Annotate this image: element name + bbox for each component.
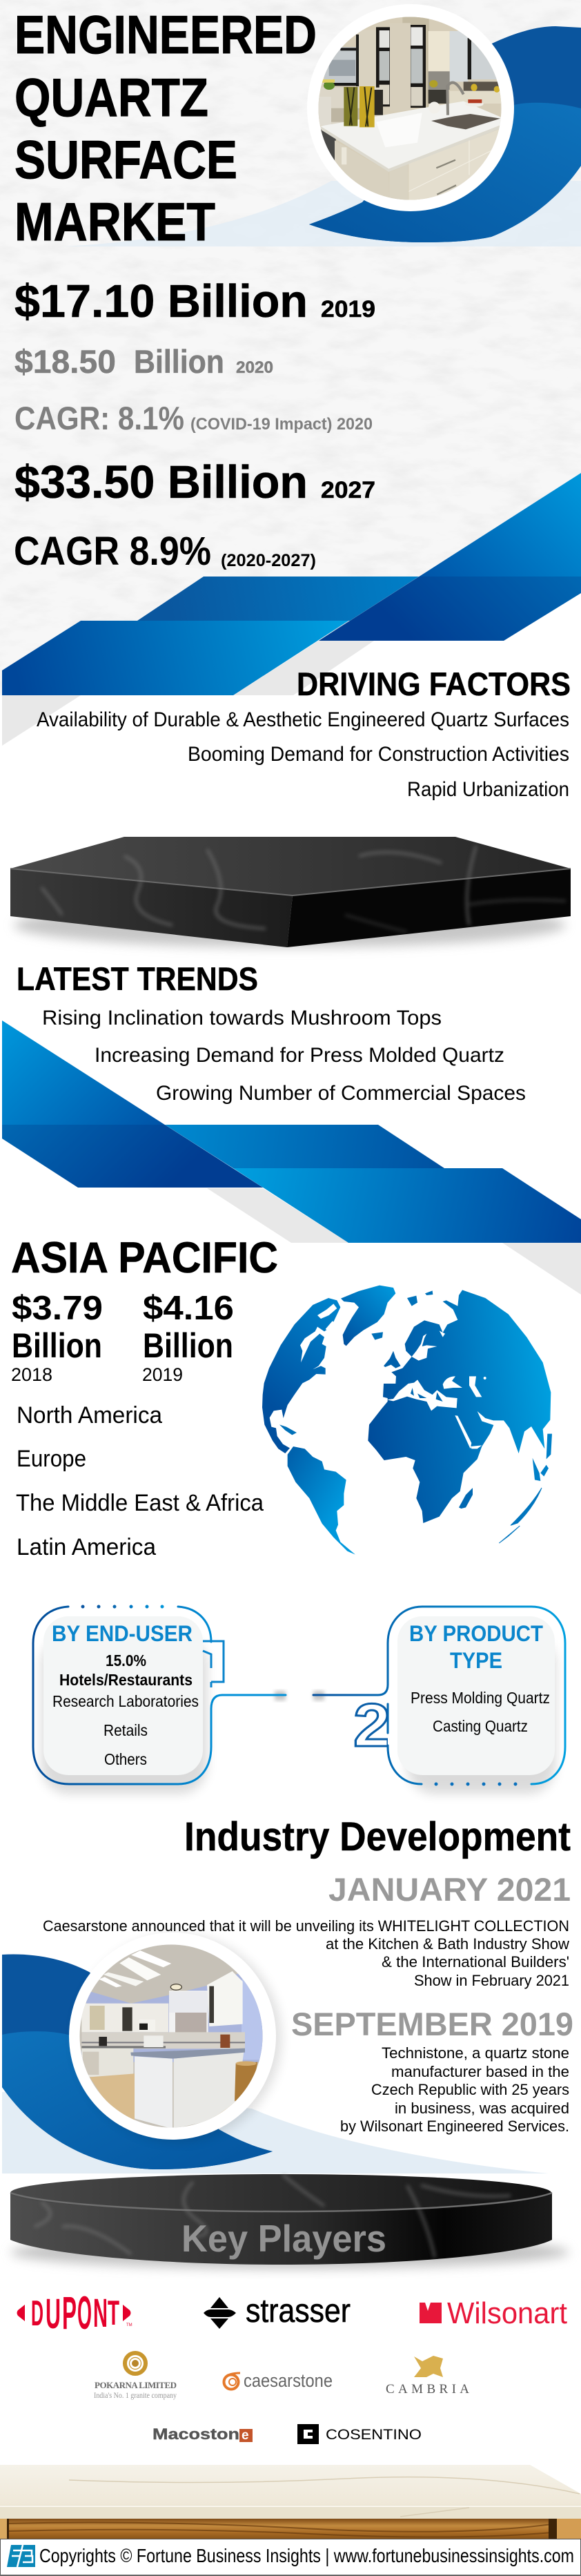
logo: dupont: O [77,2287,92,2339]
logo: dupont: TM [126,2323,132,2327]
title: QUARTZ [14,67,208,128]
logo: caesarstone: caesarstone [244,2370,333,2391]
title: MARKET [14,191,215,252]
development text: technistone: Czech Republic with 25 years [371,2081,569,2098]
panel outline [313,1607,565,1784]
other regions list: The Middle East & Africa [16,1490,264,1516]
other regions list: Latin America [17,1534,156,1560]
logo: dupont: N [93,2291,108,2336]
driving factors list: Booming Demand for Construction Activities [188,743,569,766]
product type segments [411,1689,550,1735]
number 1 [203,1641,224,1687]
latest trends list: Rising Inclination towards Mushroom Tops [42,1007,442,1029]
stat: 2020 market size: Billion [134,343,224,380]
logo: macostone: e [242,2428,249,2443]
logo: cambria [386,2356,469,2396]
title [14,4,317,252]
lighter blue crescent band [2,2031,273,2169]
panel dots [435,1783,518,1785]
other regions list: Europe [17,1446,86,1472]
panel: by product type [313,1607,565,1794]
icon: fortune business insights logo [7,2545,35,2567]
lower swoosh and kitchen photo [2,1933,549,2173]
latest trends list: Increasing Demand for Press Molded Quartz [95,1044,504,1067]
logo: pokarna limited: POKARNA LIMITED [95,2380,177,2390]
stat: forecast CAGR: CAGR 8.9% [14,529,211,574]
logo: strasser: strasser [246,2293,351,2330]
panel inner card [43,1616,203,1775]
stat: 2019 market size: 2019 [321,296,375,322]
stat: COVID CAGR [14,400,373,436]
development text: caesarstone: Caesarstone announced that it will be unveiling its WHITELIGHT COLLECTION [43,1917,569,1935]
leading segment share: 15.0% [106,1652,146,1669]
asia pacific 2018 value: $3.79 [12,1290,103,1327]
icon: world globe [262,1286,552,1555]
development text: technistone [340,2044,569,2135]
logo: pokarna limited: India's No. 1 granite company [94,2390,177,2400]
number 2: 2 [353,1691,391,1759]
development text: caesarstone: at the Kitchen & Bath Industry Show [326,1935,569,1953]
driving factors list: Rapid Urbanization [407,778,569,801]
logo: cosentino [297,2424,422,2444]
end-user segments: Others [104,1750,147,1768]
diagonal blue stripes, lower [2,1020,581,1295]
asia pacific 2019 value: Billion [143,1326,233,1365]
leading segment share [59,1652,193,1689]
panel shadow [407,1636,555,1794]
logo: pokarna limited [94,2353,177,2400]
footer copyright bar [0,2539,581,2576]
logo: cosentino: COSENTINO [326,2427,422,2443]
development text: technistone: by Wilsonart Engineered Services. [340,2118,569,2135]
panel inner card [397,1616,555,1775]
development text: technistone: Technistone, a quartz stone [382,2044,569,2062]
light blue wave [2,2092,549,2173]
dark blue crescent [2,1954,273,2169]
logo: wilsonart: Wilsonart [447,2296,567,2330]
black marble slab [10,837,571,947]
title: ENGINEERED [14,4,317,65]
white photo ring [307,4,514,211]
development text: caesarstone [43,1917,569,1989]
asia pacific 2019 value [142,1290,234,1385]
latest trends list [42,1007,526,1105]
development text: technistone: in business, was acquired [395,2100,569,2117]
other regions list: North America [17,1402,162,1429]
asia pacific 2019 value: $4.16 [143,1290,234,1327]
heading: latest trends: LATEST TRENDS [17,960,258,997]
stat: 2020 market size [14,343,273,380]
date: september 2019: SEPTEMBER 2019 [291,2006,573,2042]
black marble disc with key players heading [10,2174,569,2269]
asia pacific 2019 value: 2019 [142,1364,183,1385]
development text: caesarstone: Show in February 2021 [414,1972,569,1989]
logo: dupont [17,2287,132,2339]
end-user segments [52,1692,199,1768]
logo: dupont: U [46,2290,61,2337]
lighter blue crescent band [309,103,581,242]
kitchen photo [78,1942,264,2131]
by product type heading [409,1621,543,1673]
logo: macostone: Macoston [152,2425,239,2443]
panel shadow [41,1636,207,1794]
product type segments: Press Molding Quartz [411,1689,550,1707]
logo: dupont: T [108,2294,119,2332]
dark blue crescent [309,26,581,242]
latest trends list: Growing Number of Commercial Spaces [156,1082,526,1105]
other regions list [16,1402,264,1560]
key players heading: Key Players [181,2217,386,2260]
stat: 2020 market size: 2020 [236,358,273,377]
by product type heading: TYPE [450,1648,502,1673]
by product type heading: BY PRODUCT [409,1621,543,1646]
photo ring shadow [75,1935,282,2142]
development text: caesarstone: & the International Builders' [382,1953,569,1970]
wooden table base [0,2519,581,2539]
diagonal blue stripes, upper [2,473,581,746]
stat: 2027 market size: $33.50 Billion [14,456,308,508]
end-user segments: Research Laboratories [52,1692,199,1710]
development text: technistone: manufacturer based in the [391,2063,569,2080]
heading: asia pacific: ASIA PACIFIC [11,1234,278,1282]
logo: dupont: D [31,2294,43,2334]
driving factors list [37,708,569,801]
asia pacific 2018 value: 2018 [11,1364,52,1385]
logo: cambria: CAMBRIA [386,2382,469,2396]
connector shadows [275,1691,324,1701]
asia pacific 2018 value [11,1290,103,1385]
stat: COVID CAGR: CAGR: 8.1% [14,400,184,436]
logo: dupont: P [62,2287,77,2339]
light blue wave [62,181,581,246]
stat: COVID CAGR: (COVID-19 Impact) 2020 [190,415,373,434]
by end-user heading: BY END-USER [52,1621,193,1646]
product type segments: Casting Quartz [433,1717,528,1735]
marble backdrop: header and market stats [0,0,581,695]
logo: strasser [204,2293,351,2330]
title: SURFACE [14,129,237,190]
asia pacific 2018 value: Billion [12,1326,102,1365]
white photo ring [69,1933,276,2140]
stat: 2027 market size: 2027 [321,477,375,503]
date: january 2021: JANUARY 2021 [328,1871,571,1908]
leading segment share: Hotels/Restaurants [59,1671,193,1689]
stat: 2020 market size: $18.50 [14,343,116,380]
kitchen photo [316,14,505,202]
header graphic: blue swoosh and kitchen photo [62,4,581,246]
stat: forecast CAGR: (2020-2027) [221,551,316,570]
panel dots [81,1605,164,1609]
panel: by end-user [33,1605,286,1794]
panel outline [33,1607,286,1784]
stat: 2019 market size: $17.10 Billion [14,275,308,327]
marble table top [0,2465,581,2519]
end-user segments: Retails [104,1721,148,1739]
